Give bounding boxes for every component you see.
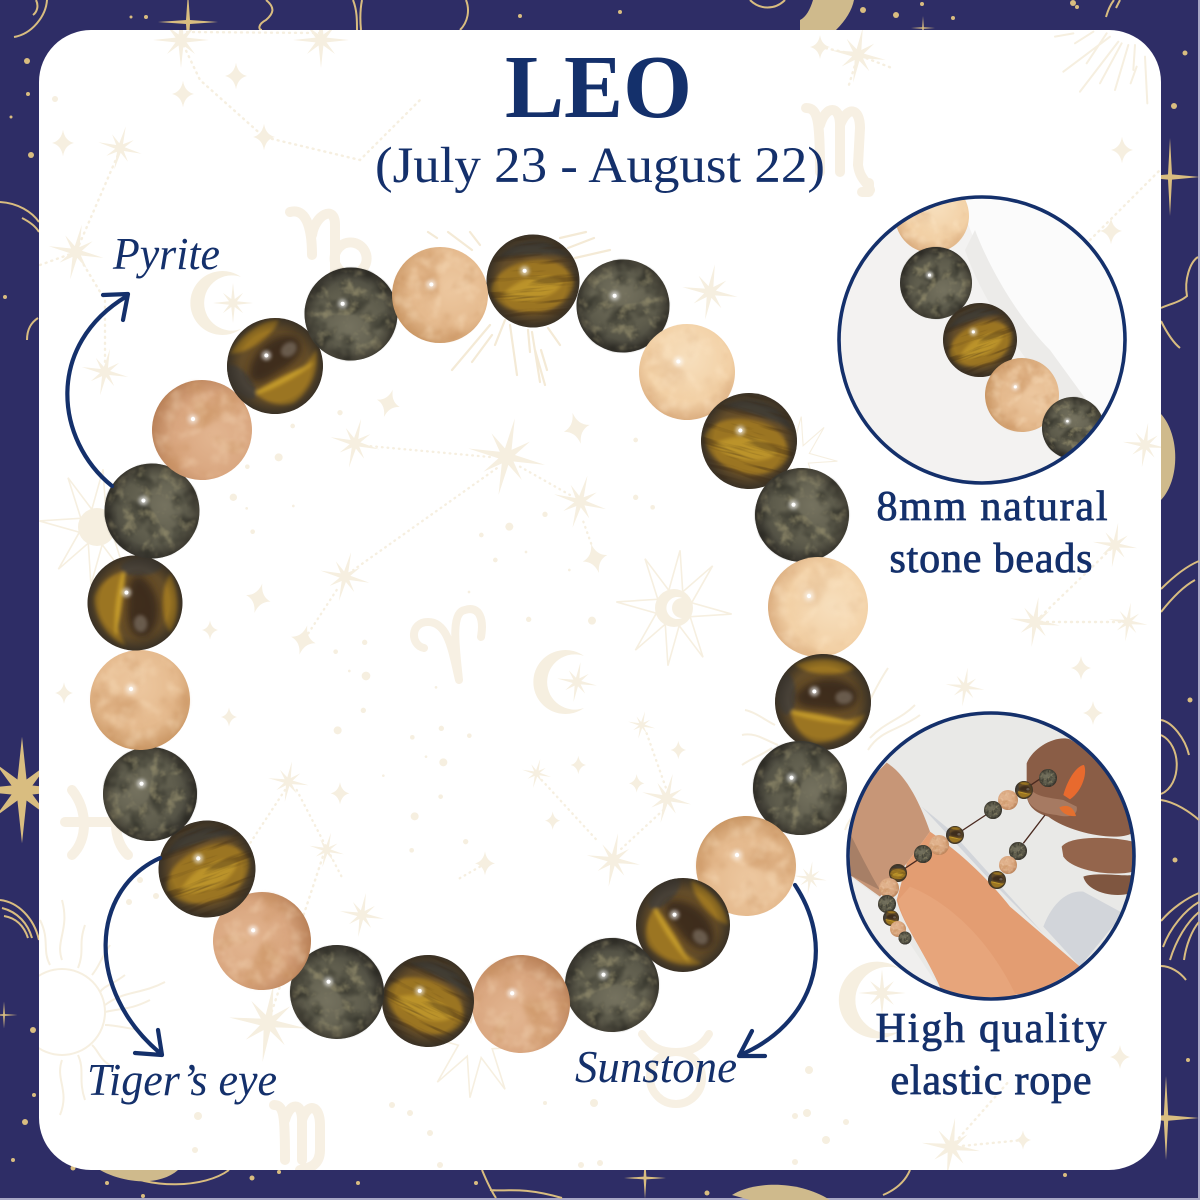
- bead: pyrite: [97, 456, 207, 566]
- arrow: Sunstone: [739, 885, 816, 1056]
- label: Pyrite: Pyrite: [112, 228, 220, 279]
- photo: bead close-up: [837, 195, 1127, 485]
- caption: beads: 8mm natural: [876, 484, 1108, 530]
- bead: pyrite: [552, 925, 672, 1045]
- bead: tiger's eye: [773, 652, 873, 752]
- caption: beads: [876, 484, 1108, 582]
- bracelet of beads: [76, 231, 886, 1067]
- bead: pyrite: [734, 722, 866, 854]
- label: Sunstone: Sunstone: [575, 1041, 737, 1092]
- lower wall: [850, 877, 945, 1000]
- subheading: dates: (July 23 - August 22): [375, 138, 825, 194]
- cords: [905, 777, 1045, 868]
- bead: tiger's eye: [207, 298, 343, 434]
- bead: sunstone: [750, 539, 886, 675]
- outlined moon stars: [616, 550, 732, 666]
- bead: tiger's eye: [690, 382, 808, 500]
- sun rays behind top of bracelet: [428, 232, 610, 385]
- bead: sunstone: [195, 874, 329, 1008]
- bead: tiger's eye: [483, 231, 583, 331]
- wall shadows: [922, 807, 1043, 933]
- bead: tiger's eye: [84, 552, 186, 654]
- wrist back: [850, 763, 930, 897]
- bead: pyrite: [748, 461, 856, 569]
- caption: elastic rope: High quality: [876, 1006, 1106, 1052]
- bead: tiger's eye: [145, 807, 269, 931]
- photo: wrist with elastic rope: [840, 705, 1150, 1005]
- caption: beads: stone beads: [890, 536, 1092, 582]
- callout: Pyrite: [67, 228, 220, 486]
- callout: Tiger's eye: [87, 858, 277, 1105]
- bead: sunstone: [458, 941, 584, 1067]
- forearm: [897, 832, 1080, 998]
- caption: elastic rope: elastic rope: [890, 1058, 1092, 1104]
- bead: sunstone: [619, 304, 755, 440]
- arrow: Tiger's eye: [106, 858, 162, 1055]
- arrow: Pyrite: [67, 294, 128, 486]
- caption: elastic rope: [876, 1006, 1106, 1104]
- bead: sunstone: [134, 362, 270, 498]
- bead: sunstone: [392, 247, 488, 343]
- bead: pyrite: [84, 728, 216, 860]
- bead: sunstone: [682, 802, 810, 930]
- title: [375, 38, 825, 194]
- hand and fingers: [1027, 738, 1132, 837]
- bead: pyrite: [283, 938, 391, 1046]
- central constellations, dots and symbols: [230, 386, 697, 891]
- bead: pyrite: [559, 242, 687, 370]
- callout: Sunstone: [575, 885, 816, 1092]
- bead: tiger's eye: [617, 859, 749, 991]
- heading: LEO: LEO: [505, 38, 692, 137]
- zodiac glyph shapes: [65, 108, 870, 1170]
- bead: pyrite: [285, 248, 417, 380]
- crescents with stars: [190, 271, 906, 1038]
- label: Tiger's eye: Tiger’s eye: [87, 1054, 277, 1105]
- white mesh fabric: [966, 199, 1123, 414]
- bead: sunstone: [76, 636, 204, 764]
- bead: tiger's eye: [367, 940, 489, 1062]
- sun left: [39, 900, 166, 1116]
- rays top right: [1055, 32, 1147, 103]
- sun right: [742, 668, 920, 830]
